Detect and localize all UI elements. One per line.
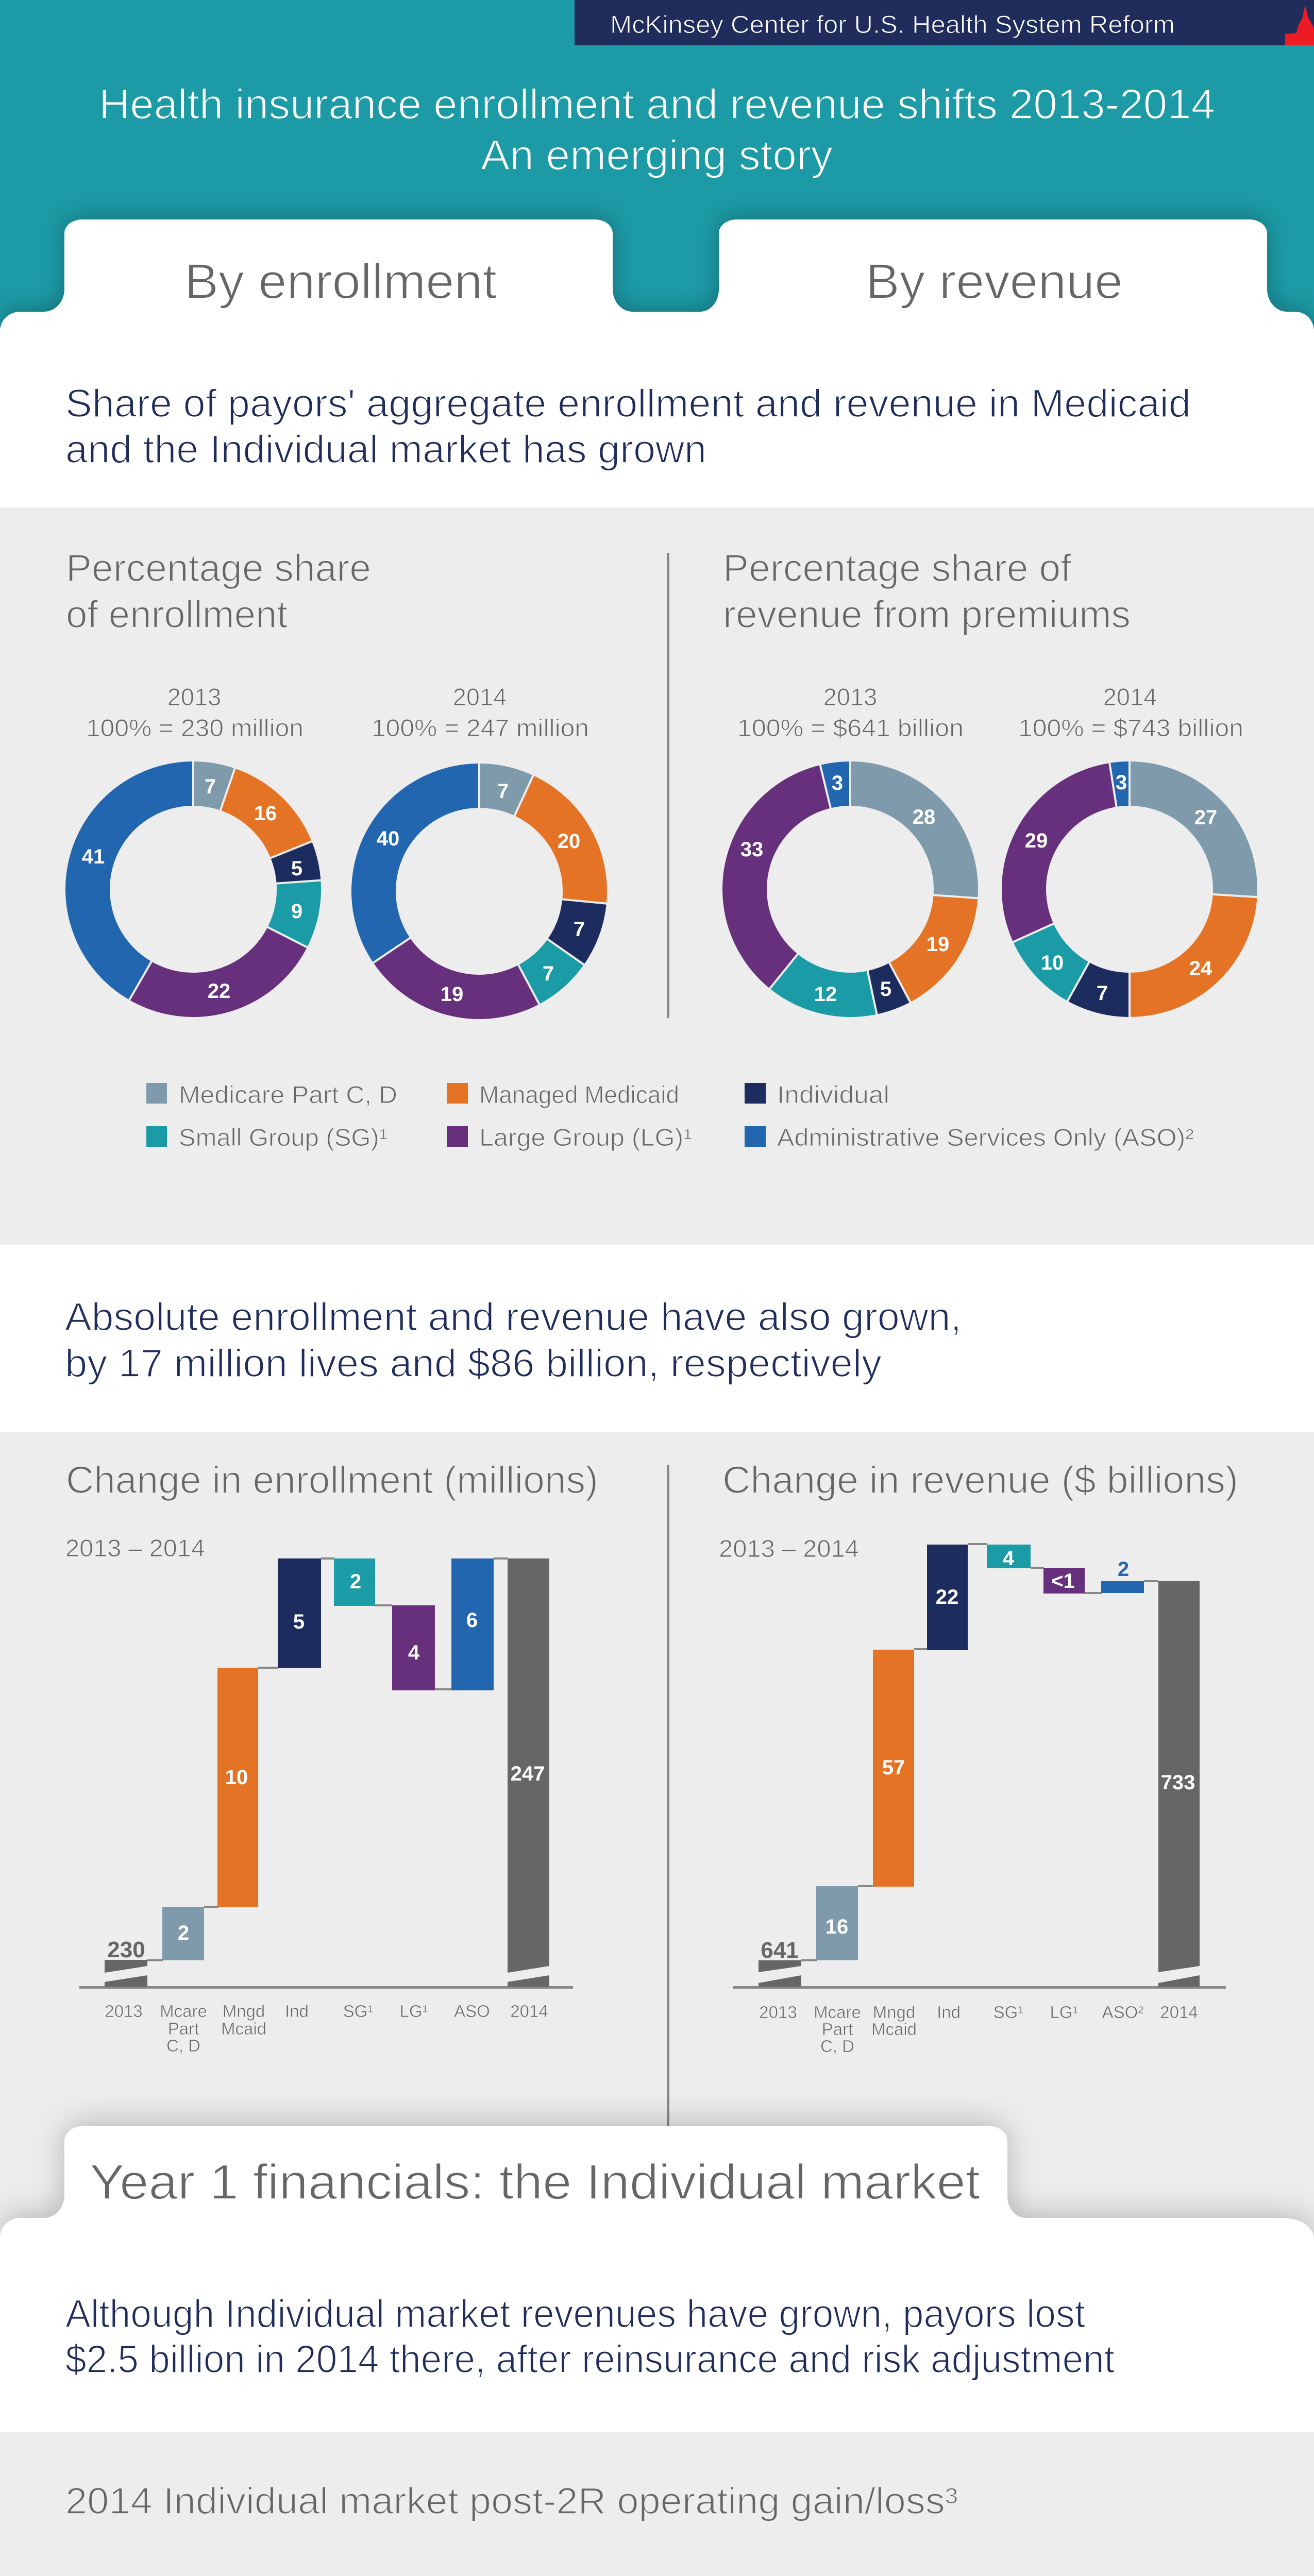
bar: Individual <box>278 1558 321 1668</box>
donut chart: revenue 2013: 19 <box>926 933 949 956</box>
bar: 2014: 733 <box>1161 1771 1195 1794</box>
legend: Managed Medicaid <box>479 1081 679 1108</box>
legend: Individual <box>777 1081 889 1108</box>
heading: percentage share of revenue: Percentage share of <box>723 547 1071 589</box>
donut chart: revenue 2014: 10 <box>1041 952 1064 974</box>
donut chart: enrollment 2014: 7 <box>497 780 509 803</box>
donut chart: enrollment 2013: 16 <box>254 802 277 825</box>
axis labels: 2014 <box>1160 2003 1198 2022</box>
title <box>99 81 1215 179</box>
icon: capitol <box>1285 5 1314 45</box>
caption: revenue 2013 <box>737 683 964 741</box>
donut chart: enrollment 2014: 7 <box>543 962 554 985</box>
heading: individual market losses: Although Individual market revenues have grown, payors lost <box>65 2292 1085 2336</box>
bar: 2014 <box>1158 1581 1200 1987</box>
caption: enrollment 2014: 100% = 247 million <box>372 714 589 741</box>
axis labels: Part <box>822 2020 853 2039</box>
bar: Medicare: 16 <box>826 1916 848 1938</box>
heading: absolute enrollment and revenue <box>65 1295 962 1385</box>
panel: operating gain and loss <box>0 2432 1314 2576</box>
heading: share of payors: and the Individual market has grown <box>65 428 706 471</box>
caption: enrollment 2014 <box>372 683 589 741</box>
donut chart: enrollment 2014: 19 <box>441 983 463 1006</box>
bar: Medicare <box>162 1907 204 1960</box>
caption: enrollment 2013: 2013 <box>167 683 221 710</box>
axis labels: Ind <box>285 2002 309 2021</box>
tab label: by enrollment: By enrollment <box>184 254 497 309</box>
caption: enrollment period: 2013 – 2014 <box>65 1534 205 1562</box>
donut chart: revenue 2014: 29 <box>1025 829 1048 852</box>
caption: enrollment 2014: 2014 <box>453 683 507 710</box>
caption: enrollment 2013: 100% = 230 million <box>86 714 304 741</box>
bar: Managed Medicaid: 10 <box>225 1766 248 1789</box>
donut chart: enrollment 2013: 41 <box>82 845 105 868</box>
donut chart: enrollment 2013: 9 <box>291 900 302 923</box>
bar: Large Group: 4 <box>408 1641 420 1664</box>
bar: Large Group: <1 <box>1051 1570 1075 1592</box>
bar: ASO <box>1101 1558 1144 1593</box>
heading: absolute enrollment and revenue: by 17 million lives and $86 billion, respectively <box>65 1342 882 1385</box>
heading: percentage share of enrollment: of enrollment <box>66 593 288 636</box>
heading: individual market losses: $2.5 billion in 2014 there, after reinsurance and risk adjustment <box>65 2337 1115 2381</box>
donut chart: enrollment 2013: 22 <box>208 980 230 1003</box>
donut chart: enrollment 2014 <box>332 744 627 1039</box>
donut chart: revenue 2013: 12 <box>814 983 837 1006</box>
axis labels: 2013 <box>759 2003 797 2022</box>
tab label: by revenue: By revenue <box>866 254 1123 309</box>
bar: 2014: 247 <box>511 1762 545 1785</box>
donut chart: revenue 2013: 33 <box>740 838 763 861</box>
folder tabs: by enrollment and by revenue <box>0 219 1314 507</box>
axis labels: SG¹ <box>343 2002 373 2021</box>
axis labels: ASO <box>454 2002 490 2021</box>
bar: Managed Medicaid: 57 <box>882 1756 905 1779</box>
donut chart: enrollment 2014: 40 <box>377 827 399 850</box>
title: An emerging story <box>481 132 833 179</box>
bar: ASO: 2 <box>1118 1558 1129 1581</box>
axis labels: ASO² <box>1102 2003 1143 2022</box>
axis labels: SG¹ <box>993 2003 1023 2022</box>
donut chart: revenue 2013: 3 <box>832 772 843 794</box>
top navigation bar: McKinsey Center for U.S. Health System Reform <box>610 11 1175 39</box>
header band <box>0 0 1314 361</box>
bar: Individual <box>927 1545 968 1650</box>
donut chart: enrollment 2013: 5 <box>291 857 302 880</box>
heading: percentage share of revenue <box>723 547 1131 636</box>
axis labels <box>105 2002 548 2055</box>
heading: percentage share of enrollment: Percentage share <box>66 547 371 589</box>
legend: Administrative Services Only (ASO)² <box>777 1124 1194 1151</box>
bar: 2013: 230 <box>107 1937 145 1962</box>
bar: 2013 <box>759 1938 801 1987</box>
bar: Managed Medicaid <box>873 1650 914 1887</box>
donut chart: enrollment 2014: 20 <box>558 830 580 853</box>
tab label: Year 1 financials: the Individual market <box>90 2155 980 2210</box>
heading: share of payors: Share of payors' aggregate enrollment and revenue in Medicaid <box>65 382 1191 426</box>
donut chart: revenue 2013: 28 <box>913 806 935 828</box>
donut chart: revenue 2014: 24 <box>1189 957 1212 980</box>
axis labels: 2014 <box>510 2002 548 2021</box>
heading: individual market losses <box>65 2292 1115 2381</box>
bar: Small Group <box>987 1545 1031 1570</box>
axis labels: Mngd <box>223 2002 265 2021</box>
bar: Large Group <box>1043 1568 1085 1594</box>
waterfall chart: enrollment <box>79 1557 573 2055</box>
panel heading: 2014 Individual market post-2R operating gain/loss³ <box>65 2481 958 2522</box>
caption: revenue 2014 <box>1018 683 1243 741</box>
caption: revenue 2014: 2014 <box>1103 683 1157 710</box>
heading: percentage share of revenue: revenue from premiums <box>723 593 1131 636</box>
bar: Small Group: 4 <box>1003 1547 1015 1570</box>
axis labels: C, D <box>820 2037 854 2056</box>
axis labels: LG¹ <box>1050 2003 1079 2022</box>
donut chart: enrollment 2013 <box>49 745 338 1033</box>
bar: Large Group <box>392 1605 435 1690</box>
panel: change in enrollment and revenue <box>0 1432 1314 2266</box>
axis labels: Mcare <box>814 2003 861 2022</box>
panel: percentage share <box>0 507 1314 1245</box>
bar: Individual: 5 <box>293 1611 305 1633</box>
donut chart: revenue 2014: 3 <box>1116 771 1127 794</box>
heading: change in enrollment: Change in enrollment (millions) <box>66 1459 598 1501</box>
bar: 2014 <box>508 1558 549 1987</box>
legend <box>146 1081 1194 1151</box>
axis labels <box>759 2003 1198 2056</box>
bar: Medicare <box>816 1886 858 1960</box>
bar: 2013: 641 <box>761 1938 799 1963</box>
axis labels: LG¹ <box>399 2002 428 2021</box>
axis labels: Mngd <box>873 2003 915 2022</box>
donut chart: revenue 2013 <box>702 741 999 1038</box>
caption: enrollment 2013 <box>86 683 304 741</box>
axis labels: Part <box>168 2019 199 2038</box>
donut chart: revenue 2014: 7 <box>1097 982 1108 1005</box>
caption: revenue period: 2013 – 2014 <box>719 1535 859 1562</box>
donut chart: enrollment 2014: 7 <box>574 918 585 941</box>
axis labels: Mcare <box>160 2002 207 2021</box>
bar: Small Group: 2 <box>350 1570 361 1593</box>
bar: Individual: 22 <box>936 1586 958 1608</box>
bar: ASO: 6 <box>466 1609 478 1632</box>
legend: Medicare Part C, D <box>179 1081 397 1108</box>
folder tab: year 1 financials <box>0 2126 1314 2432</box>
bar: ASO <box>451 1558 494 1690</box>
heading: change in revenue: Change in revenue ($ billions) <box>722 1459 1238 1501</box>
axis labels: Mcaid <box>871 2020 917 2039</box>
donut chart: enrollment 2013: 7 <box>205 775 216 798</box>
axis labels: Mcaid <box>221 2019 266 2038</box>
caption: revenue 2013: 2013 <box>823 683 877 710</box>
caption: revenue 2013: 100% = $641 billion <box>737 714 964 741</box>
legend: Small Group (SG)¹ <box>179 1124 388 1151</box>
title: Health insurance enrollment and revenue shifts 2013-2014 <box>99 81 1215 128</box>
bar: 2013 <box>105 1937 147 1987</box>
waterfall chart: revenue <box>733 1543 1226 2056</box>
bar: Small Group <box>334 1558 375 1606</box>
donut chart: revenue 2014 <box>986 745 1273 1033</box>
donut chart: revenue 2013: 5 <box>880 978 891 1001</box>
heading: share of payors <box>65 382 1191 471</box>
donut chart: revenue 2014: 27 <box>1194 806 1217 829</box>
axis labels: Ind <box>937 2003 961 2022</box>
bar: Medicare: 2 <box>178 1922 189 1944</box>
axis labels: 2013 <box>105 2002 143 2021</box>
legend: Large Group (LG)¹ <box>479 1124 692 1151</box>
axis labels: C, D <box>166 2036 200 2055</box>
top navigation bar <box>575 0 1314 45</box>
heading: absolute enrollment and revenue: Absolute enrollment and revenue have also grown, <box>65 1295 962 1339</box>
bar: Managed Medicaid <box>217 1668 258 1907</box>
heading: percentage share of enrollment <box>66 547 371 636</box>
caption: revenue 2014: 100% = $743 billion <box>1018 714 1243 741</box>
